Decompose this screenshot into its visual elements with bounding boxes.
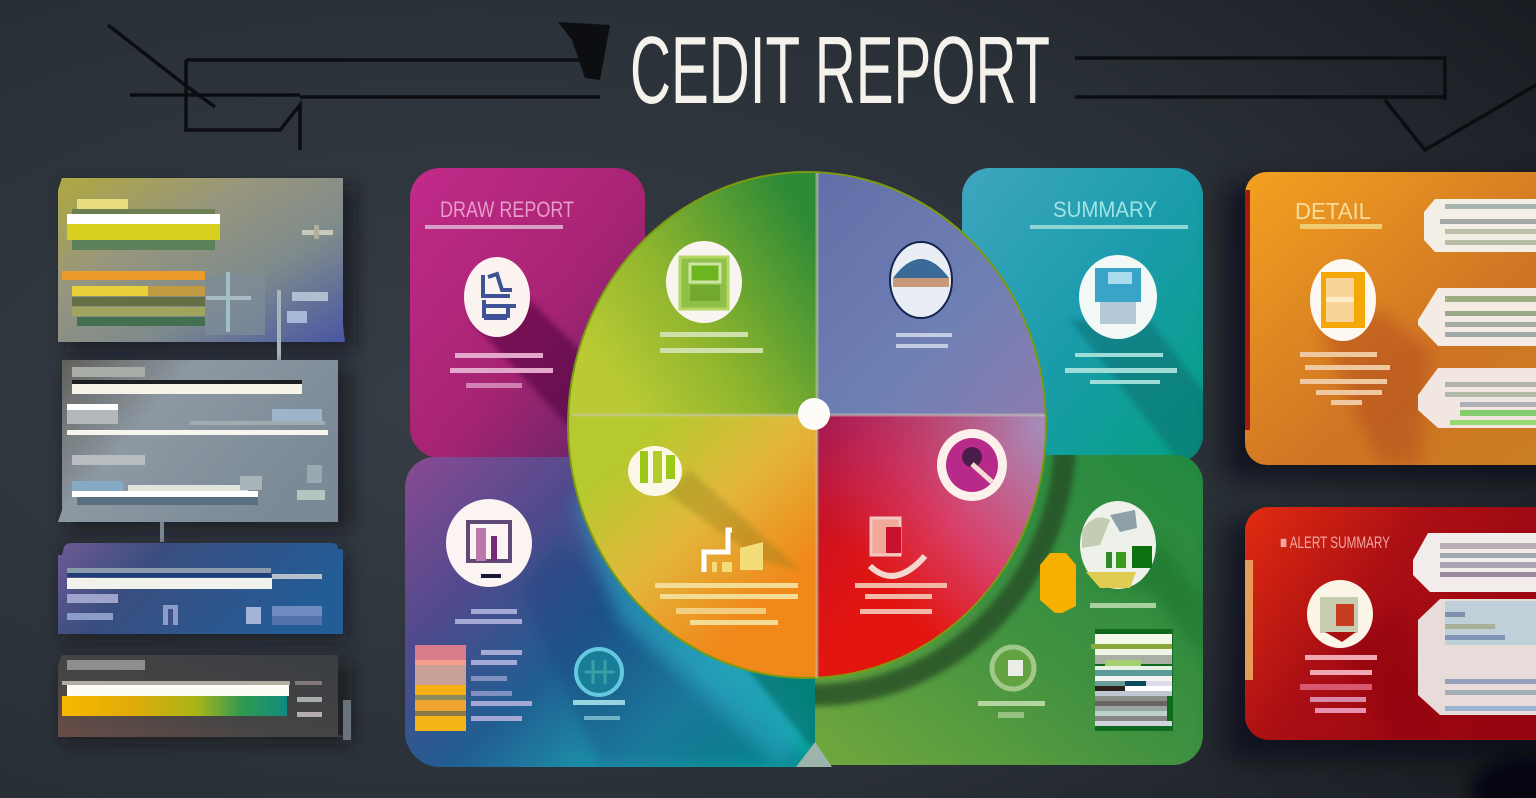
donut chart <box>565 170 1049 680</box>
title: CEDIT REPORT <box>630 17 1050 124</box>
left panel 1 <box>58 178 356 360</box>
caption lines <box>573 700 625 720</box>
icon: area chart <box>704 530 763 572</box>
card one <box>1413 533 1536 592</box>
icon: bar chart badge <box>446 499 532 587</box>
left panel 4 <box>58 655 352 744</box>
stacked colour list <box>415 645 466 731</box>
heading: DRAW REPORT <box>440 197 574 222</box>
icon: small green ring <box>992 647 1034 689</box>
header ornament lines <box>108 25 1536 150</box>
icon: red report badge <box>1307 580 1373 648</box>
card one <box>1424 199 1536 252</box>
left panel 2 <box>58 360 351 542</box>
green caption <box>1090 603 1156 608</box>
icon: magnifier badge <box>937 429 1007 501</box>
icon: orange notebook badge <box>1310 259 1376 341</box>
panel: orange detail <box>1225 172 1536 480</box>
heading: ■ ALERT SUMMARY <box>1280 533 1390 552</box>
card two <box>1418 288 1536 346</box>
text lines <box>1065 353 1177 384</box>
slate text lines <box>896 333 952 348</box>
text lines <box>1300 655 1377 713</box>
text lines <box>455 609 532 721</box>
green text lines <box>660 332 763 353</box>
icon: teal ring <box>576 649 622 695</box>
text lines <box>1300 352 1390 405</box>
text lines <box>450 353 553 388</box>
orange text lines <box>655 583 798 625</box>
icon: green printer badge <box>666 241 742 323</box>
centre hub <box>798 398 830 430</box>
icon: gold coin <box>1040 553 1076 613</box>
corner shadow <box>1470 756 1536 798</box>
spokes <box>572 173 1045 678</box>
panel: green lower right <box>815 455 1203 765</box>
panel: red alerts <box>1225 507 1536 760</box>
left panel 3 <box>58 543 347 642</box>
icon: globe chart badge <box>1080 501 1156 589</box>
panel: magenta report <box>410 168 650 460</box>
heading: DETAIL <box>1295 198 1371 224</box>
document table <box>1091 629 1173 731</box>
icon: lime mug <box>628 446 682 496</box>
red text lines <box>855 583 947 614</box>
icon: arrow marker <box>558 22 610 80</box>
icon: red receipt badge <box>870 518 925 576</box>
card three <box>1418 368 1536 428</box>
panel: blue purple lower left <box>405 457 830 770</box>
panel: teal summary <box>962 168 1210 463</box>
icon: document badge <box>464 257 530 337</box>
card two <box>1418 599 1536 715</box>
heading: SUMMARY <box>1053 197 1157 222</box>
icon: clipboard badge <box>1079 255 1157 339</box>
icon: slate globe badge <box>890 242 952 318</box>
green small captions <box>978 701 1045 718</box>
diamond notch <box>796 742 832 767</box>
